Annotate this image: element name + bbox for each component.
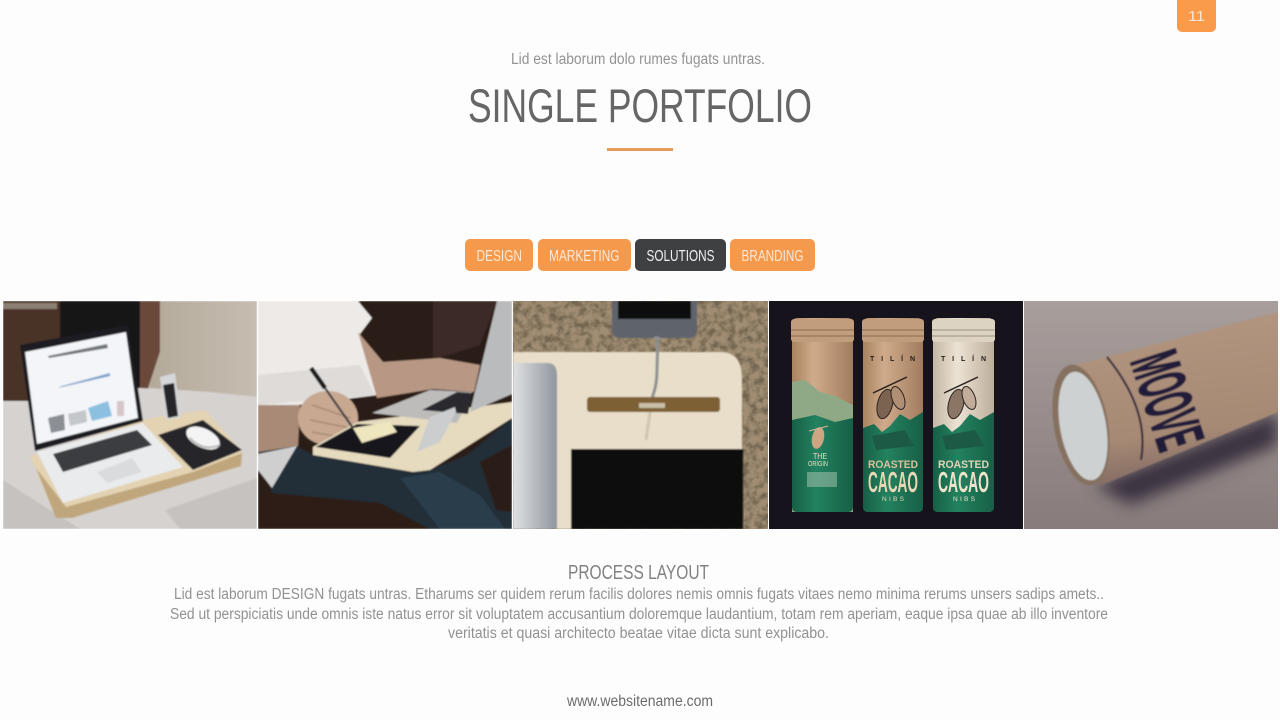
description paragraph: Sed ut perspiciatis unde omnis iste natus error sit voluptatem accusantium doloremque laudantium, totam rem aperiam, eaque ipsa quae ab illo inventore [170, 606, 1108, 623]
photo: bamboo desk top view with phone cable [513, 301, 768, 529]
button: design [465, 239, 533, 271]
button: solutions: SOLUTIONS [646, 248, 714, 265]
tube: the origin [791, 318, 854, 512]
button: marketing [538, 239, 631, 271]
button: solutions [635, 239, 726, 271]
category filter buttons [465, 239, 815, 271]
subtitle: Lid est laborum dolo rumes fugats untras. [511, 51, 765, 68]
section heading: PROCESS LAYOUT [568, 561, 709, 584]
tube: roasted cacao kraft: TILÍN [870, 354, 915, 363]
tube: roasted cacao kraft: CACAO [868, 467, 918, 499]
tube: roasted cacao kraft: NIBS [882, 496, 905, 503]
button: design: DESIGN [476, 248, 522, 265]
button: branding [730, 239, 815, 271]
title: SINGLE PORTFOLIO [468, 79, 812, 132]
tube: roasted cacao cream: NIBS [953, 496, 976, 503]
button: marketing: MARKETING [549, 248, 620, 265]
website url: www.websitename.com [566, 693, 713, 710]
description paragraph [170, 586, 1108, 642]
tube: roasted cacao cream: CACAO [938, 467, 989, 499]
tube: the origin: ORIGIN [808, 461, 828, 468]
photo: kraft MOOVE poster tube: MOOVE [1116, 342, 1218, 459]
photo: person writing beside a laptop [258, 301, 512, 529]
tube: roasted cacao kraft [862, 318, 924, 512]
page number badge [1177, 0, 1216, 32]
tube: roasted cacao cream [932, 318, 995, 512]
tube: roasted cacao cream: ROASTED [938, 459, 989, 471]
title underline [607, 148, 673, 151]
photo: kraft MOOVE poster tube [1024, 301, 1278, 529]
description paragraph: Lid est laborum DESIGN fugats untras. Etharums ser quidem rerum facilis dolores nemis omnis fugats vitaes nemo minima rerums unsers sadips amets.. [174, 586, 1104, 603]
photo: laptop on bamboo desk on a bed [3, 301, 257, 529]
photo: roasted cacao packaging tubes [769, 301, 1023, 529]
button: branding: BRANDING [742, 248, 804, 265]
page number badge: 11 [1188, 8, 1205, 25]
tube: roasted cacao cream: TILÍN [941, 354, 986, 363]
description paragraph: veritatis et quasi architecto beatae vitae dicta sunt explicabo. [448, 625, 829, 642]
tube: the origin: THE [813, 452, 827, 461]
tube: roasted cacao kraft: ROASTED [868, 459, 918, 471]
